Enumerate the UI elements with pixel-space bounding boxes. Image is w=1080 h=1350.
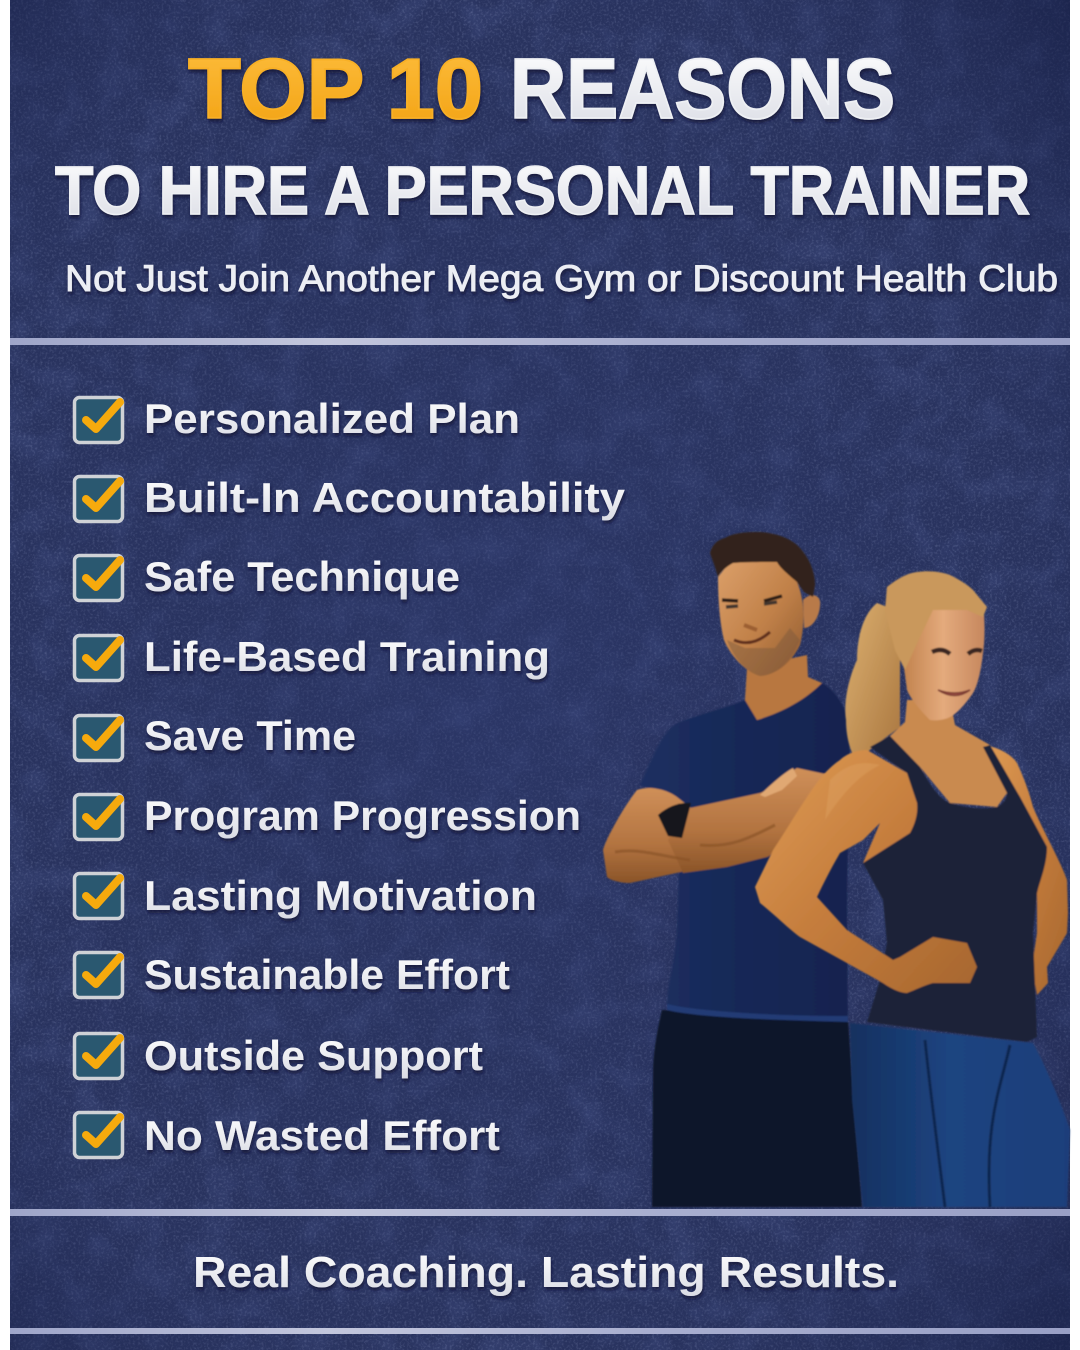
crossed arms	[603, 788, 700, 883]
item 1: Personalized Plan	[144, 395, 520, 442]
title	[55, 42, 1030, 229]
title line 1: TOP 10	[188, 42, 483, 137]
subtitle: Not Just Join Another Mega Gym or Discount Health Club	[65, 258, 1058, 299]
stubble, eyes and mouth	[722, 596, 800, 676]
item 3: Safe Technique	[144, 553, 460, 600]
top divider	[10, 338, 1070, 345]
item 5: Save Time	[144, 712, 356, 759]
face	[718, 558, 803, 676]
leggings	[850, 1023, 1070, 1207]
tank top	[863, 736, 1047, 1042]
item 6: Program Progression	[144, 792, 581, 839]
left arm	[755, 750, 977, 993]
title line 1: REASONS	[510, 42, 895, 137]
item 9: Outside Support	[144, 1032, 483, 1079]
shirt	[640, 683, 850, 1022]
item 4: Life-Based Training	[144, 633, 550, 680]
item 2: Built-In Accountability	[144, 474, 626, 521]
leggings seam	[925, 1040, 1010, 1207]
shirt hem	[667, 1004, 848, 1022]
ponytail	[845, 603, 900, 762]
eyes and mouth	[932, 650, 982, 696]
illustration: female trainer	[755, 571, 1070, 1207]
watch	[658, 803, 691, 838]
hair	[710, 532, 815, 597]
hair top	[885, 571, 987, 670]
shoulder highlight	[825, 763, 880, 820]
illustration: male trainer	[603, 532, 862, 1207]
forearm shading	[615, 825, 775, 860]
ear	[803, 595, 820, 628]
item 10: No Wasted Effort	[144, 1112, 500, 1159]
item 7: Lasting Motivation	[144, 872, 537, 919]
right arm	[985, 745, 1068, 995]
neck	[745, 655, 822, 720]
neck and chest	[890, 700, 1007, 807]
checklist	[74, 395, 626, 1159]
face	[902, 600, 984, 720]
tagline: Real Coaching. Lasting Results.	[193, 1248, 899, 1297]
item 8: Sustainable Effort	[144, 951, 510, 998]
bottom divider	[10, 1209, 1070, 1216]
shorts	[652, 1010, 862, 1207]
footer divider	[10, 1328, 1070, 1334]
